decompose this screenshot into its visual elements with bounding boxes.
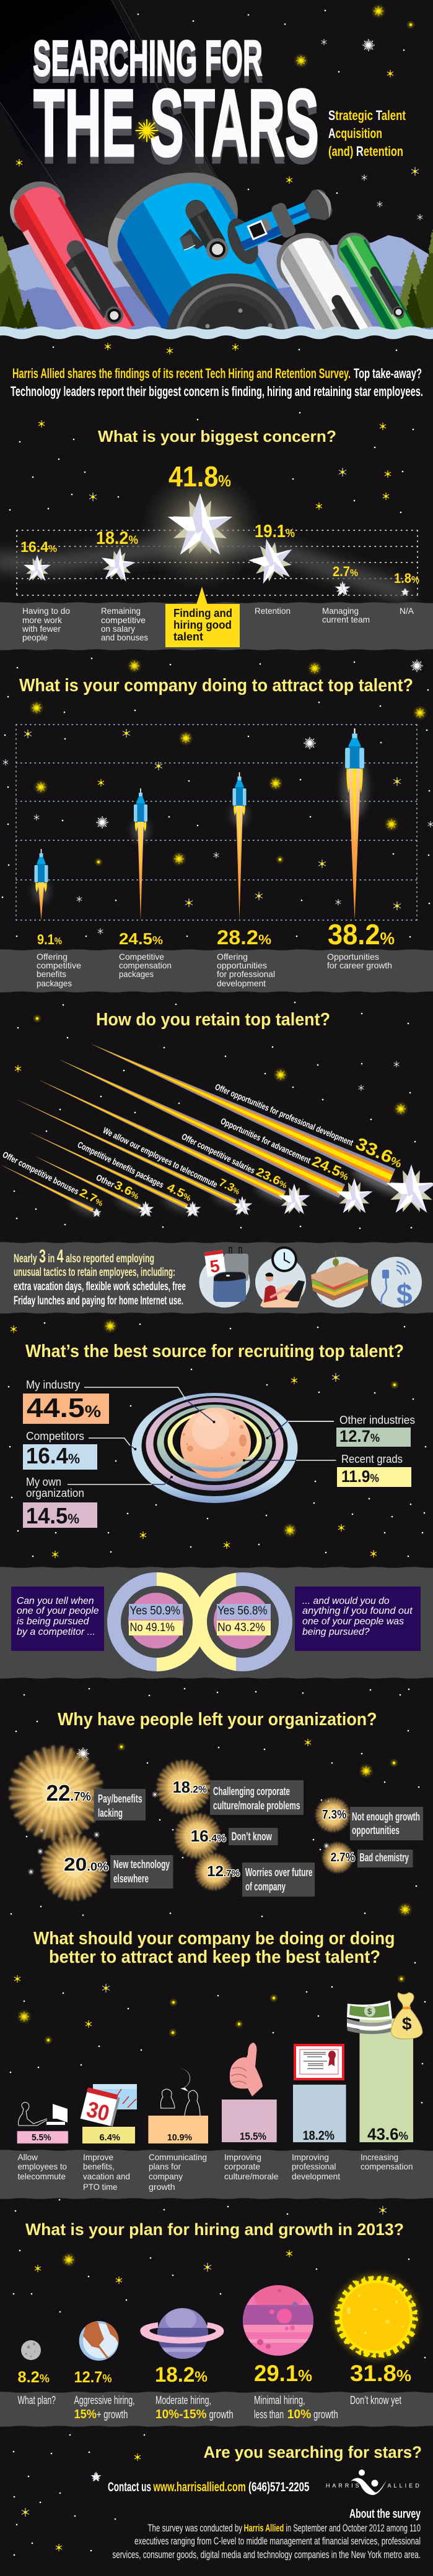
bar 43.6% compensation: $ bbox=[402, 2014, 412, 2033]
band: should-do labels: Communicating bbox=[149, 2152, 207, 2162]
burst 20.0% new technology bbox=[41, 1834, 173, 1901]
bar 6.4% benefits bbox=[80, 2084, 137, 2143]
band: attract labels: for professional bbox=[217, 969, 275, 979]
white telescope bbox=[276, 233, 373, 329]
icon: clock and man at laptop bbox=[255, 1246, 306, 1307]
band: attract labels: Competitive bbox=[119, 952, 164, 962]
label: other industries: 12.7% bbox=[339, 1427, 380, 1445]
bar 15.5% culture: 15.5% bbox=[240, 2130, 266, 2142]
star chart: biggest concern bbox=[0, 460, 419, 596]
earth bbox=[79, 2321, 119, 2361]
tactics text: unusual tactics to retain employees, including: bbox=[14, 1266, 175, 1279]
green telescope bbox=[337, 233, 416, 329]
band: should-do labels: Increasing bbox=[361, 2152, 398, 2162]
intro paragraph bbox=[11, 366, 423, 399]
question box left: by a competitor ... bbox=[17, 1627, 95, 1637]
rocket chart bbox=[16, 725, 417, 950]
icon: sandwich bbox=[311, 1251, 368, 1307]
band: concern labels: and bonuses bbox=[101, 632, 148, 642]
band: should-do labels: professional bbox=[292, 2161, 336, 2171]
planet bbox=[180, 1408, 251, 1478]
rocket 28.2% bbox=[232, 772, 248, 920]
band: should-do labels: development bbox=[292, 2171, 340, 2181]
comet labels: Offer competitive salaries bbox=[180, 1131, 257, 1176]
value 1.8: 1.8% bbox=[394, 571, 419, 586]
comet labels: We allow our employees to telecommute bbox=[102, 1125, 219, 1189]
title bbox=[33, 30, 319, 183]
burst 16.4% dont know bbox=[175, 1813, 278, 1859]
firework chart: reasons for leaving bbox=[9, 1746, 423, 1901]
value 16.4: 16.4% bbox=[20, 539, 57, 556]
burst 20.0% new technology: New technology bbox=[113, 1858, 170, 1871]
burst 22.7% pay bbox=[9, 1746, 146, 1841]
planet values: 29.1% bbox=[254, 2361, 312, 2386]
band: hiring plan labels: 15% bbox=[74, 2408, 97, 2421]
comet 2.7% bbox=[0, 1163, 94, 1212]
subtitle: Strategic Talent Acquisition and Retention: Strategic Talent bbox=[328, 108, 406, 123]
telescopes bbox=[10, 172, 416, 329]
bar 15.5% culture bbox=[222, 2043, 277, 2142]
band: attract labels: Offering bbox=[217, 952, 248, 962]
band: unusual retention tactics bbox=[0, 1242, 433, 1314]
band: should-do labels: PTO time bbox=[83, 2182, 118, 2192]
trees left bbox=[0, 236, 38, 328]
subtitle: Strategic Talent Acquisition and Retention: (and) Retention bbox=[328, 144, 403, 159]
about the survey: Harris Allied bbox=[244, 2523, 284, 2534]
icon: vacation calendar and suitcase bbox=[199, 1247, 250, 1307]
band: concern labels: N/A bbox=[400, 606, 414, 616]
logo: Harris Allied bbox=[326, 2470, 419, 2495]
band: should-do labels: benefits, bbox=[83, 2161, 115, 2171]
donut right: 56.8 yes, 43.2 no: No 43.2% bbox=[217, 1621, 265, 1634]
band: hiring plan labels: growth bbox=[209, 2408, 234, 2421]
comet labels: Opportunities for advancement bbox=[219, 1116, 312, 1165]
band: should-do labels bbox=[0, 2150, 433, 2199]
comet 7.3% bbox=[15, 1096, 237, 1205]
comet chart bbox=[0, 1035, 433, 1217]
label: recent grads: Recent grads bbox=[341, 1453, 403, 1465]
band: should-do labels: plans for bbox=[149, 2161, 181, 2171]
icon: vacation calendar and suitcase: 5 bbox=[209, 1256, 221, 1277]
burst 7.3% growth bbox=[315, 1798, 423, 1840]
star 2.7 bbox=[335, 581, 350, 596]
comet 4.5% bbox=[27, 1129, 188, 1209]
ringed planet chart bbox=[23, 1379, 415, 1528]
band: concern labels: competitive bbox=[101, 615, 146, 625]
tactics text bbox=[14, 1246, 186, 1307]
planet values: 12.7% bbox=[74, 2369, 112, 2386]
heading: attract top talent: What is your company doing to attract top talent? bbox=[19, 676, 413, 696]
band: attract labels: competitive bbox=[37, 960, 81, 970]
star 16.4 bbox=[24, 555, 51, 581]
highlighted callout: finding and hiring good talent: hiring good bbox=[173, 619, 232, 631]
rocket values: 9.1% bbox=[37, 931, 62, 947]
heading: why people left: Why have people left your organization? bbox=[58, 1710, 377, 1730]
moon bbox=[21, 2340, 41, 2360]
question box right: ... and would you do bbox=[302, 1596, 390, 1606]
question box left: one of your people bbox=[17, 1606, 99, 1616]
band: should-do labels: Allow bbox=[17, 2152, 38, 2162]
logo: Harris Allied: ALLIED bbox=[388, 2483, 419, 2489]
band: hiring plan labels: 10% bbox=[287, 2408, 312, 2421]
burst 18.2% culture: 18.2% bbox=[173, 1778, 207, 1796]
label: my industry bbox=[23, 1379, 109, 1424]
band: attract labels: development bbox=[217, 978, 266, 988]
highlighted callout: finding and hiring good talent bbox=[165, 587, 240, 647]
comet labels: 24.5% bbox=[310, 1153, 352, 1183]
band: concern labels: Managing bbox=[322, 606, 359, 616]
comet labels: 4.5% bbox=[165, 1181, 194, 1204]
comet labels: 23.6% bbox=[254, 1165, 290, 1192]
about the survey: The survey was conducted by bbox=[147, 2523, 243, 2534]
label: my industry: My industry bbox=[26, 1379, 80, 1391]
comet labels bbox=[1, 1082, 406, 1208]
band: should-do labels: vacation and bbox=[83, 2171, 130, 2181]
comet labels: Other bbox=[95, 1172, 116, 1189]
subtitle: Strategic Talent Acquisition and Retention bbox=[328, 108, 406, 159]
question box left: Can you tell when bbox=[17, 1596, 94, 1606]
icon: wifi and dollar bbox=[371, 1257, 422, 1310]
planet chart: hiring plans bbox=[17, 2276, 417, 2387]
planet values: 31.8% bbox=[350, 2361, 411, 2386]
icon: blue white star bbox=[90, 2471, 102, 2481]
heading: retain top talent: How do you retain top talent? bbox=[96, 1010, 330, 1030]
band: concern labels: current team bbox=[322, 614, 370, 624]
burst 22.7% pay: Pay/benefits bbox=[98, 1793, 142, 1805]
band: should-do labels: culture/morale bbox=[224, 2171, 279, 2181]
donut left: 50.9 yes, 49.1 no bbox=[107, 1572, 206, 1671]
band: concern labels bbox=[0, 587, 433, 650]
band: hiring plan labels bbox=[0, 2392, 433, 2427]
planet values: 18.2% bbox=[155, 2363, 208, 2387]
band: hiring plan labels: What plan? bbox=[17, 2394, 56, 2406]
question box right bbox=[295, 1587, 421, 1651]
band: should-do labels: telecommute bbox=[17, 2171, 66, 2181]
comet labels: Offer opportunities for professional development bbox=[214, 1082, 355, 1148]
burst 18.2% culture bbox=[156, 1760, 304, 1815]
contact line bbox=[108, 2480, 310, 2494]
rocket values: 24.5% bbox=[119, 929, 163, 948]
bar chart: what to do better bbox=[17, 1992, 422, 2143]
burst 18.2% culture: culture/morale problems bbox=[213, 1799, 300, 1812]
planet values: 8.2% bbox=[17, 2369, 50, 2386]
contact line: www.harrisallied.com bbox=[153, 2480, 246, 2494]
burst 7.3% growth: 7.3% bbox=[322, 1808, 347, 1822]
tactics text: Friday lunches and paying for home Internet use. bbox=[14, 1294, 183, 1307]
burst 2.7% chemistry bbox=[322, 1842, 413, 1873]
band: concern labels: more work bbox=[22, 615, 63, 625]
burst 18.2% culture: Challenging corporate bbox=[213, 1785, 290, 1798]
burst 12.7% future: of company bbox=[245, 1880, 286, 1893]
value 19.1: 19.1% bbox=[255, 522, 295, 541]
band: attract labels: opportunities bbox=[217, 960, 267, 970]
comet 33.6% bbox=[87, 1035, 395, 1186]
contact line: (646)571-2205 bbox=[248, 2480, 310, 2494]
label: other industries: Other industries bbox=[339, 1414, 415, 1426]
blue telescope eyepiece bbox=[227, 189, 332, 264]
band: concern labels: with fewer bbox=[22, 624, 61, 634]
label: my own organization: 14.5% bbox=[26, 1503, 79, 1528]
bar 10.9% communicating plans: 10.9% bbox=[167, 2132, 192, 2143]
band: hiring plan labels: 10%-15% bbox=[155, 2408, 207, 2421]
heading: what should your company do bbox=[33, 1929, 395, 1967]
comet labels: 7.3% bbox=[217, 1176, 243, 1197]
band: should-do labels: Improving bbox=[224, 2152, 261, 2162]
burst 12.7% future bbox=[195, 1853, 315, 1897]
burst 20.0% new technology: elsewhere bbox=[113, 1872, 149, 1885]
burst 16.4% dont know: 16.4% bbox=[191, 1827, 226, 1845]
band: hiring plan labels: Minimal hiring, bbox=[254, 2394, 305, 2406]
question box left: is being pursued bbox=[17, 1616, 90, 1627]
band: attract labels: compensation bbox=[119, 960, 172, 970]
comet 3.6% bbox=[33, 1154, 141, 1210]
band: should-do labels: company bbox=[149, 2171, 183, 2181]
question box right: one of your people was bbox=[302, 1616, 404, 1627]
comet labels: Competitive benefits packages bbox=[76, 1139, 165, 1190]
band: competitor pursuit questions bbox=[0, 1567, 433, 1679]
band: attract labels: Offering bbox=[37, 952, 68, 962]
bar 6.4% benefits: 30 bbox=[84, 2096, 112, 2126]
burst 22.7% pay: 22.7% bbox=[46, 1780, 91, 1806]
question box right: being pursued? bbox=[302, 1627, 370, 1637]
band: should-do labels: Improving bbox=[292, 2152, 329, 2162]
burst 20.0% new technology: 20.0% bbox=[64, 1854, 108, 1875]
band: concern labels: Remaining bbox=[101, 606, 141, 616]
subtitle: Strategic Talent Acquisition and Retention: Acquisition bbox=[328, 126, 382, 141]
label: my own organization bbox=[23, 1476, 97, 1528]
band: should-do labels: compensation bbox=[361, 2161, 413, 2171]
rings bbox=[131, 1393, 297, 1503]
blue telescope front lens bbox=[166, 274, 298, 329]
label: competitors: 16.4% bbox=[26, 1443, 80, 1468]
rocket 38.2% bbox=[342, 728, 367, 920]
planet values bbox=[17, 2361, 411, 2387]
label: competitors bbox=[23, 1430, 97, 1470]
hero illustration: telescopes and landscape bbox=[0, 0, 433, 339]
band: concern labels: Retention bbox=[255, 606, 291, 616]
star 1.8 bbox=[401, 588, 409, 596]
snow ground bbox=[0, 327, 433, 339]
bar 18.2% professional development: 18.2% bbox=[303, 2129, 335, 2143]
heading: hiring and growth plan: What is your plan for hiring and growth in 2013? bbox=[25, 2220, 404, 2239]
closing heading: Are you searching for stars? bbox=[203, 2443, 422, 2462]
burst 12.7% future: 12.7% bbox=[207, 1863, 240, 1880]
donut right: 56.8 yes, 43.2 no bbox=[193, 1572, 292, 1671]
bar 10.9% communicating plans bbox=[148, 2069, 208, 2143]
label: other industries bbox=[336, 1414, 415, 1447]
value 2.7: 2.7% bbox=[333, 564, 358, 579]
label: recent grads: 11.9% bbox=[341, 1467, 379, 1486]
trees right bbox=[396, 227, 433, 328]
label: competitors: Competitors bbox=[26, 1430, 84, 1442]
band: hiring plan labels: Moderate hiring, bbox=[155, 2394, 211, 2406]
star 19.1 bbox=[245, 533, 299, 586]
comet labels: 33.6% bbox=[353, 1134, 406, 1171]
band: attract labels: for career growth bbox=[327, 960, 392, 970]
logo: Harris Allied: HARRIS bbox=[326, 2483, 359, 2489]
value 18.2: 18.2% bbox=[96, 528, 138, 548]
comet labels: 3.6% bbox=[112, 1179, 142, 1202]
comet labels: Offer competitive bonuses bbox=[1, 1149, 81, 1196]
leader lines bbox=[68, 1387, 336, 1484]
icon: wifi and dollar: $ bbox=[396, 1278, 413, 1310]
comet 23.6% bbox=[37, 1075, 286, 1200]
bar 18.2% professional development bbox=[293, 2044, 346, 2143]
value 41.8: 41.8% bbox=[168, 460, 231, 493]
band: attract labels bbox=[0, 949, 433, 993]
star 41.8 bbox=[168, 493, 232, 554]
mountains bbox=[0, 235, 433, 331]
comet 24.5% bbox=[56, 1053, 345, 1198]
tactics text: extra vacation days, flexible work schedules, free bbox=[14, 1280, 186, 1293]
comet head stars bbox=[92, 1165, 433, 1217]
label: recent grads bbox=[337, 1453, 411, 1487]
band: concern labels: people bbox=[22, 632, 48, 642]
donut left: 50.9 yes, 49.1 no: Yes 50.9% bbox=[130, 1605, 180, 1618]
label: my own organization: organization bbox=[26, 1487, 84, 1499]
bar 43.6% compensation: 43.6% bbox=[367, 2125, 408, 2143]
bar 43.6% compensation bbox=[347, 1992, 422, 2143]
heading: biggest concern: What is your biggest concern? bbox=[98, 427, 336, 446]
band: should-do labels: employees to bbox=[17, 2161, 67, 2171]
burst 16.4% dont know: Don’t know bbox=[232, 1830, 273, 1843]
about the survey bbox=[112, 2507, 421, 2561]
pink planet bbox=[242, 2283, 316, 2356]
band: hiring plan labels: less than bbox=[254, 2408, 284, 2421]
contact line: Contact us bbox=[108, 2480, 151, 2494]
rocket values bbox=[37, 918, 395, 950]
ring passing in front of planet bbox=[170, 1452, 259, 1471]
highlighted callout: finding and hiring good talent: Finding and bbox=[173, 607, 232, 619]
comet labels: 2.7% bbox=[77, 1186, 106, 1208]
tactics text: Nearly 3 in 4 also reported employing bbox=[14, 1246, 154, 1267]
burst 7.3% growth: opportunities bbox=[352, 1824, 400, 1837]
burst 12.7% future: Worries over future bbox=[245, 1866, 313, 1879]
ringed planet bbox=[140, 2308, 224, 2359]
star 18.2 bbox=[98, 545, 137, 582]
band: attract labels: Opportunities bbox=[327, 952, 379, 962]
blue telescope finder bbox=[180, 196, 229, 261]
rocket values: 28.2% bbox=[217, 926, 271, 949]
band: attract labels: packages bbox=[119, 969, 154, 979]
band: should-do labels: corporate bbox=[224, 2161, 260, 2171]
band: hiring plan labels: growth bbox=[313, 2408, 338, 2421]
donut left: 50.9 yes, 49.1 no: No 49.1% bbox=[130, 1621, 175, 1634]
burst 2.7% chemistry: 2.7% bbox=[331, 1851, 355, 1864]
bar 6.4% benefits: 6.4% bbox=[99, 2132, 120, 2143]
burst 22.7% pay: lacking bbox=[98, 1807, 123, 1819]
highlighted callout: finding and hiring good talent: talent bbox=[173, 631, 203, 643]
rocket 24.5% bbox=[133, 788, 149, 920]
band: attract labels: benefits bbox=[37, 969, 66, 979]
blue telescope bbox=[108, 172, 300, 329]
red telescope bbox=[10, 181, 135, 329]
band: attract labels: packages bbox=[37, 978, 72, 988]
label: my industry: 44.5 % bbox=[27, 1393, 101, 1423]
bar 5.5% telecommute: 5.5% bbox=[32, 2132, 51, 2143]
rocket values: 38.2% bbox=[328, 918, 395, 950]
sun bbox=[335, 2276, 417, 2358]
band: should-do labels: Improve bbox=[83, 2152, 113, 2162]
band: concern labels: Having to do bbox=[22, 606, 70, 616]
band: should-do labels: growth bbox=[149, 2182, 175, 2192]
heading: recruiting source: What’s the best source for recruiting top talent? bbox=[25, 1342, 404, 1361]
band: hiring plan labels: Aggressive hiring, bbox=[74, 2394, 135, 2406]
rocket 9.1% bbox=[33, 849, 50, 920]
question box left bbox=[11, 1587, 104, 1651]
band: concern labels: on salary bbox=[101, 624, 135, 634]
donut right: 56.8 yes, 43.2 no: Yes 56.8% bbox=[217, 1605, 268, 1618]
heading: what should your company do: What should your company be doing or doing bbox=[33, 1929, 395, 1949]
label: my own organization: My own bbox=[26, 1476, 61, 1488]
heading: what should your company do: better to attract and keep the best talent? bbox=[49, 1947, 380, 1967]
bar 5.5% telecommute bbox=[17, 2103, 68, 2143]
band: hiring plan labels: + growth bbox=[97, 2408, 128, 2421]
band: hiring plan labels: Don’t know yet bbox=[350, 2394, 401, 2406]
question box right: anything if you found out bbox=[302, 1606, 413, 1616]
bar 43.6% compensation: $ bbox=[367, 2007, 372, 2016]
